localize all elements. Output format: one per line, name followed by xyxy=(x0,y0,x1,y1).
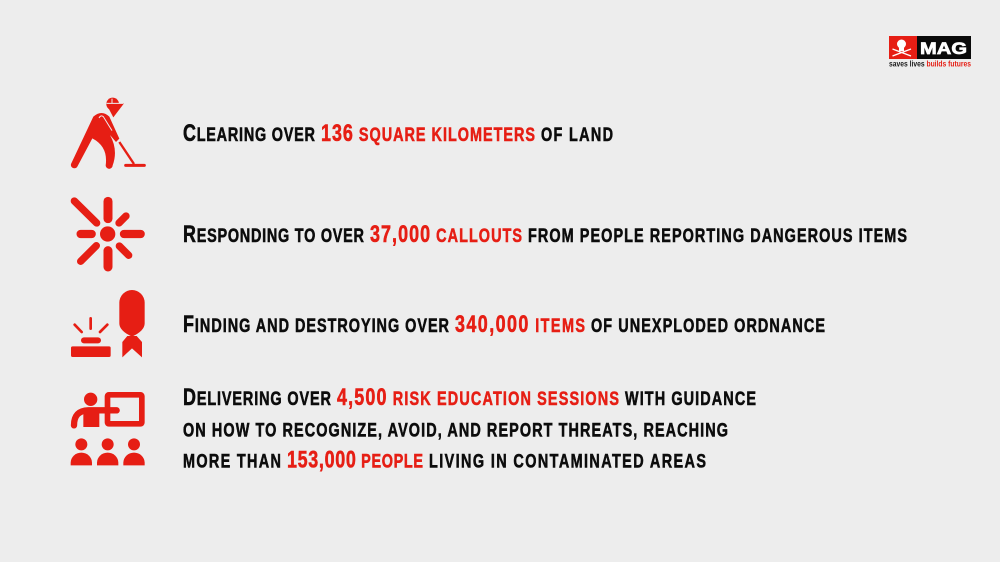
text: clearing: 136 SQUARE KILOMETERS xyxy=(321,119,535,147)
icon: deminer with detector xyxy=(71,98,144,169)
text: destroying ordnance: 340,000 ITEMS xyxy=(455,310,585,338)
text: risk education: MORE THAN xyxy=(183,449,281,472)
icon: callout burst xyxy=(74,201,141,267)
text: risk education xyxy=(183,383,756,473)
text: risk education: DELIVERING OVER xyxy=(183,383,331,411)
text: destroying ordnance: OF UNEXPLODED ORDNANCE xyxy=(591,314,825,337)
text: callouts: RESPONDING TO OVER xyxy=(183,220,364,248)
text: destroying ordnance xyxy=(183,310,825,338)
icon: teacher and audience xyxy=(71,393,145,465)
text: destroying ordnance: FINDING AND DESTROYING OVER xyxy=(183,310,449,338)
text: risk education: 4,500 RISK EDUCATION SESSIONS xyxy=(337,383,619,411)
icon: skull and crossbones xyxy=(892,40,911,56)
text: risk education: WITH GUIDANCE xyxy=(625,387,756,410)
text: clearing: OF LAND xyxy=(541,123,613,146)
text: callouts: FROM PEOPLE REPORTING DANGEROUS ITEMS xyxy=(528,224,907,247)
text: risk education: 153,000 PEOPLE xyxy=(287,446,423,473)
icon: bomb and detonator xyxy=(71,290,145,357)
text: risk education: LIVING IN CONTAMINATED AREAS xyxy=(429,449,706,472)
text: callouts: 37,000 CALLOUTS xyxy=(370,220,522,248)
text: clearing: CLEARING OVER xyxy=(183,119,315,147)
text: risk education: ON HOW TO RECOGNIZE, AVOID, AND REPORT THREATS, REACHING xyxy=(183,418,728,441)
logo wordmark: MAG xyxy=(920,39,967,58)
text: callouts xyxy=(183,220,907,248)
text: clearing xyxy=(183,119,613,147)
logo tagline: saves lives builds futures xyxy=(889,60,971,68)
logo: MAG xyxy=(889,36,971,68)
